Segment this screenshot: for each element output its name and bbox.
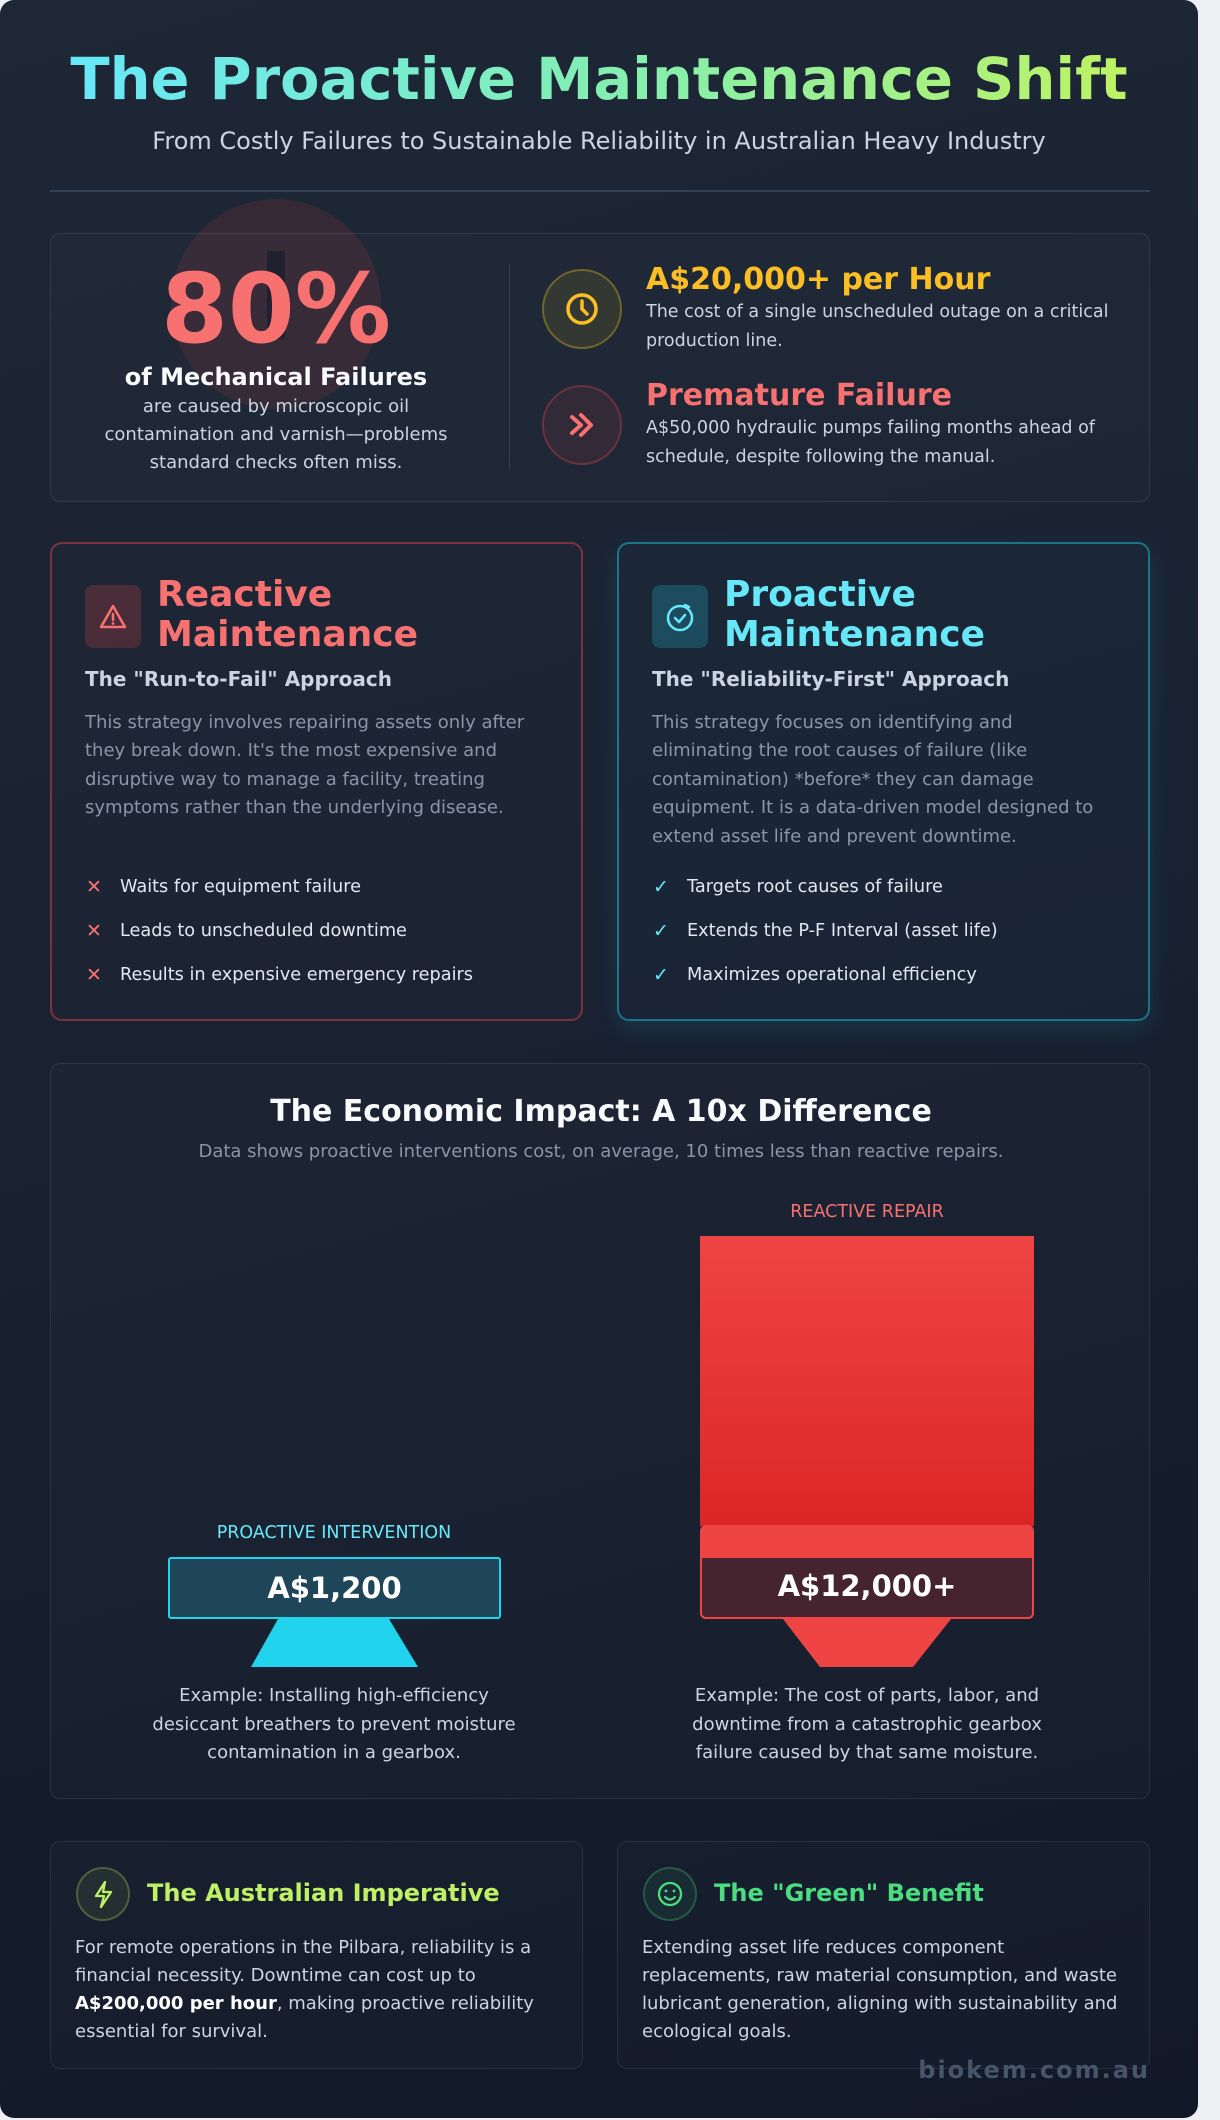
heading: The Australian Imperative bbox=[147, 1879, 500, 1907]
list: benefits: Extends the P-F Interval (asset life) bbox=[687, 921, 998, 941]
panel: key stats bbox=[50, 233, 1150, 502]
panel: economic impact bbox=[50, 1063, 1150, 1799]
stat: premature failure: A$50,000 hydraulic pumps failing months ahead of schedule, despite following the manual. bbox=[646, 418, 1095, 467]
chart: reactive cost: REACTIVE REPAIR bbox=[790, 1202, 944, 1222]
list: downsides: Results in expensive emergency repairs bbox=[120, 965, 473, 985]
heading bbox=[724, 574, 985, 655]
subheading: The "Reliability-First" Approach bbox=[652, 667, 1009, 691]
list: benefits: Targets root causes of failure bbox=[687, 877, 943, 897]
stat: premature failure bbox=[646, 378, 1096, 467]
list: downsides: Waits for equipment failure bbox=[120, 877, 361, 897]
subheading: The "Run-to-Fail" Approach bbox=[85, 667, 392, 691]
list: benefits: ✓ bbox=[653, 964, 669, 986]
chart: reactive cost: A$12,000+ bbox=[778, 1569, 956, 1603]
chart: proactive cost: A$1,200 bbox=[267, 1571, 402, 1605]
chart: proactive cost bbox=[152, 1523, 516, 1763]
body text: Extending asset life reduces component replacements, raw material consumption, and waste lubricant generation, aligning with sustainability and ecological goals. bbox=[642, 1937, 1117, 2042]
heading bbox=[157, 574, 418, 655]
list: downsides: Leads to unscheduled downtime bbox=[120, 921, 407, 941]
stat: cost per hour: A$20,000+ per Hour bbox=[646, 262, 990, 297]
heading: The "Green" Benefit bbox=[714, 1879, 984, 1907]
panel: proactive maintenance bbox=[617, 542, 1150, 1021]
icon: smiley bbox=[643, 1867, 697, 1921]
list: downsides: ✕ bbox=[86, 920, 102, 942]
icon: background warning circle bbox=[171, 199, 381, 409]
heading: Maintenance bbox=[724, 614, 985, 655]
heading: Reactive bbox=[157, 574, 332, 615]
watermark: biokem.com.au bbox=[918, 2056, 1150, 2084]
heading: Maintenance bbox=[157, 614, 418, 655]
list: benefits: Maximizes operational efficiency bbox=[687, 965, 977, 985]
stat: premature failure: Premature Failure bbox=[646, 378, 952, 413]
heading: Proactive bbox=[724, 574, 916, 615]
title: The Proactive Maintenance Shift bbox=[70, 46, 1128, 113]
description: This strategy focuses on identifying and eliminating the root causes of failure (like contamination) *before* they can damage equipment. It is a data-driven model designed to extend asset life and prevent downtime. bbox=[652, 712, 1093, 847]
icon: lightning bbox=[76, 1867, 130, 1921]
icon: clock bbox=[542, 269, 622, 349]
list: benefits: ✓ bbox=[653, 920, 669, 942]
subtitle: From Costly Failures to Sustainable Reliability in Australian Heavy Industry bbox=[152, 127, 1046, 155]
subheading: Data shows proactive interventions cost, on average, 10 times less than reactive repairs. bbox=[198, 1141, 1004, 1162]
stat description: are caused by microscopic oil contamination and varnish—problems standard checks often miss. bbox=[104, 396, 447, 473]
body text: For remote operations in the Pilbara, reliability is a financial necessity. Downtime can cost up to A$200,000 per hour, making proactive reliability essential for survival. bbox=[75, 1937, 534, 2042]
stat label: of Mechanical Failures bbox=[125, 363, 427, 391]
list: downsides bbox=[86, 876, 473, 986]
stat: 80%: 80% bbox=[161, 253, 391, 365]
icon: gauge check bbox=[652, 585, 708, 648]
list: benefits bbox=[653, 876, 998, 986]
chart: reactive cost bbox=[692, 1202, 1042, 1763]
heading: The Economic Impact: A 10x Difference bbox=[270, 1094, 932, 1129]
chart: proactive cost: Example: Installing high-efficiency desiccant breathers to prevent moisture contamination in a gearbox. bbox=[152, 1685, 516, 1763]
panel: reactive maintenance bbox=[50, 542, 583, 1021]
list: downsides: ✕ bbox=[86, 876, 102, 898]
list: downsides: ✕ bbox=[86, 964, 102, 986]
chart: reactive cost: Example: The cost of parts, labor, and downtime from a catastrophic gearbox failure caused by that same moisture. bbox=[692, 1685, 1042, 1763]
chart: proactive cost: PROACTIVE INTERVENTION bbox=[217, 1523, 451, 1543]
list: benefits: ✓ bbox=[653, 876, 669, 898]
panel: australian imperative bbox=[50, 1841, 583, 2069]
icon: warning bbox=[85, 585, 141, 648]
description: This strategy involves repairing assets only after they break down. It's the most expensive and disruptive way to manage a facility, treating symptoms rather than the underlying disease. bbox=[85, 712, 524, 818]
stat: cost per hour: The cost of a single unscheduled outage on a critical production line. bbox=[646, 302, 1108, 351]
panel: green benefit bbox=[617, 1841, 1150, 2069]
stat: cost per hour bbox=[646, 262, 1108, 351]
icon: fast-forward bbox=[542, 385, 622, 465]
